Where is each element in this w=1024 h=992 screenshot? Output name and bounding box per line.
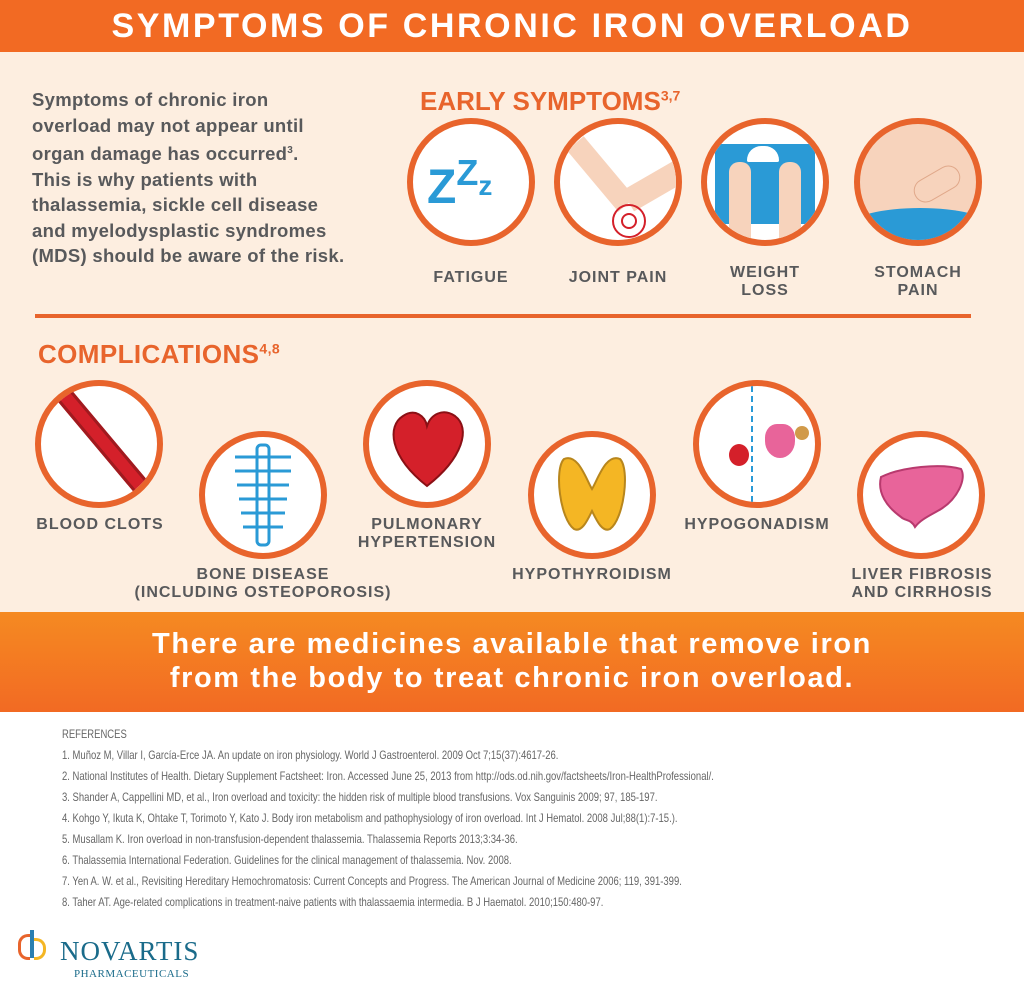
references: 4. Kohgo Y, Ikuta K, Ohtake T, Torimoto Y, Kato J. Body iron metabolism and pathophysiology of iron overload. Int J Hematol. 2008 Jul;88(1):7-15.). bbox=[62, 811, 678, 825]
label: liver: AND CIRRHOSIS bbox=[851, 584, 992, 601]
label: pulmonary hypertension bbox=[358, 516, 496, 551]
label: pulmonary hypertension: HYPERTENSION bbox=[358, 534, 496, 551]
icon: thyroid bbox=[528, 431, 656, 559]
icon: hypogonadism bbox=[693, 380, 821, 508]
references bbox=[62, 727, 714, 909]
callout banner: from the body to treat chronic iron overload. bbox=[170, 662, 854, 694]
intro text: This is why patients with bbox=[32, 169, 257, 190]
header bar bbox=[0, 0, 1024, 52]
logo: novartis: NOVARTIS bbox=[60, 936, 199, 966]
label: stomach pain bbox=[874, 264, 962, 299]
label: stomach pain: PAIN bbox=[897, 282, 939, 299]
intro text: (MDS) should be aware of the risk. bbox=[32, 245, 344, 266]
label: hypothyroidism: HYPOTHYROIDISM bbox=[512, 566, 672, 583]
divider bbox=[35, 314, 971, 318]
label: liver: LIVER FIBROSIS bbox=[851, 566, 993, 583]
icon: bone disease bbox=[199, 431, 327, 559]
intro text: overload may not appear until bbox=[32, 114, 304, 136]
label: weight loss bbox=[730, 264, 800, 299]
label: pulmonary hypertension: PULMONARY bbox=[371, 516, 483, 533]
label: blood clots: BLOOD CLOTS bbox=[36, 516, 164, 533]
references: 5. Musallam K. Iron overload in non-transfusion-dependent thalassemia. Thalassemia Reports 2013;3:34-36. bbox=[62, 832, 518, 846]
label: weight loss: WEIGHT bbox=[730, 264, 800, 281]
label: bone disease bbox=[135, 566, 391, 601]
callout banner bbox=[0, 612, 1024, 712]
label: bone disease: BONE DISEASE bbox=[197, 566, 329, 583]
intro text bbox=[32, 89, 344, 266]
label: joint pain: JOINT PAIN bbox=[569, 269, 667, 286]
label: bone disease: (INCLUDING OSTEOPOROSIS) bbox=[135, 584, 391, 601]
intro text: Symptoms of chronic iron bbox=[32, 89, 268, 110]
references: 2. National Institutes of Health. Dietary Supplement Factsheet: Iron. Accessed June 25, 2013 from http://ods.od.nih.gov/factsheets/Iron-HealthProfessional/. bbox=[62, 769, 714, 783]
icon: weight loss bbox=[701, 118, 829, 246]
icon: heart bbox=[363, 380, 491, 508]
references: 3. Shander A, Cappellini MD, et al., Iron overload and toxicity: the hidden risk of multiple blood transfusions. Vox Sanguinis 2009; 97, 185-197. bbox=[62, 790, 657, 804]
icon: stomach pain bbox=[854, 118, 982, 246]
label: weight loss: LOSS bbox=[741, 282, 789, 299]
references: REFERENCES bbox=[62, 727, 127, 741]
header bar: SYMPTOMS OF CHRONIC IRON OVERLOAD bbox=[111, 7, 913, 45]
intro text: thalassemia, sickle cell disease bbox=[32, 194, 318, 215]
beige background panel bbox=[0, 52, 1024, 612]
icon: joint pain bbox=[554, 118, 682, 246]
references: 8. Taher AT. Age-related complications in treatment-naive patients with thalassaemia intermedia. B J Haematol. 2010;150:480-97. bbox=[62, 895, 603, 909]
label: stomach pain: STOMACH bbox=[874, 264, 962, 281]
icon: blood clots bbox=[35, 380, 163, 508]
intro text: organ damage has occurred3. bbox=[32, 143, 299, 164]
heading: early symptoms: EARLY SYMPTOMS3,7 bbox=[420, 86, 680, 116]
icon: fatigue bbox=[407, 118, 535, 246]
references: 6. Thalassemia International Federation. Guidelines for the clinical management of thalassemia. Nov. 2008. bbox=[62, 853, 512, 867]
logo: novartis: PHARMACEUTICALS bbox=[74, 968, 189, 980]
logo: novartis bbox=[18, 930, 199, 980]
references: 1. Muñoz M, Villar I, García-Erce JA. An update on iron physiology. World J Gastroenterol. 2009 Oct 7;15(37):4617-26. bbox=[62, 748, 558, 762]
icon: fatigue: ZZz bbox=[427, 152, 492, 214]
intro text: and myelodysplastic syndromes bbox=[32, 220, 327, 241]
label: liver bbox=[851, 566, 993, 601]
callout banner: There are medicines available that remove iron bbox=[152, 628, 872, 660]
heading: complications: COMPLICATIONS4,8 bbox=[38, 339, 280, 369]
icon: liver bbox=[857, 431, 985, 559]
references: 7. Yen A. W. et al., Revisiting Hereditary Hemochromatosis: Current Concepts and Progress. The American Journal of Medicine 2006; 119, 391-399. bbox=[62, 874, 682, 888]
label: hypogonadism: HYPOGONADISM bbox=[684, 516, 830, 533]
label: fatigue: FATIGUE bbox=[433, 269, 509, 286]
